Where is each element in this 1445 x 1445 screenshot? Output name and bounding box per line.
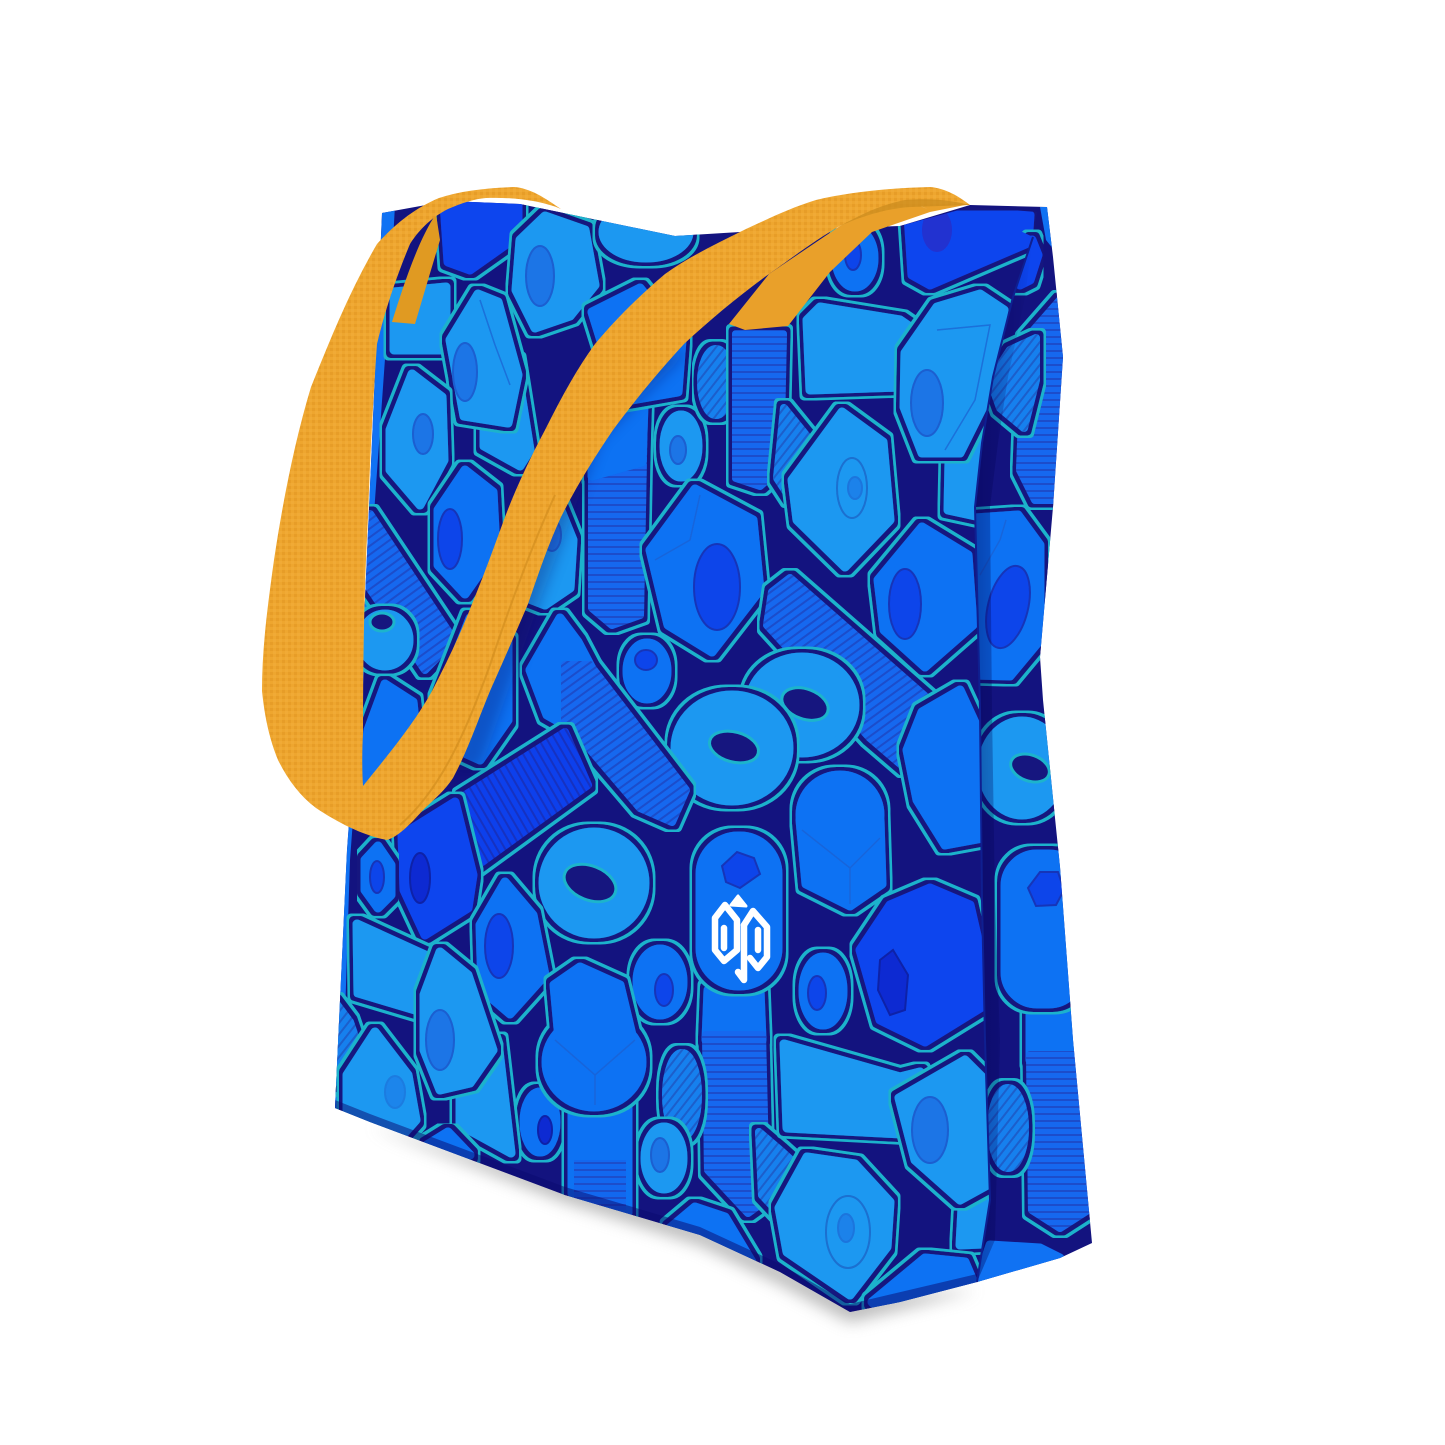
bottom left bar xyxy=(357,924,425,1013)
bolt shaft with logo xyxy=(706,990,766,1213)
gusset top light edge xyxy=(1040,207,1054,250)
vertical threaded bolt xyxy=(736,334,783,486)
threads under cap nut xyxy=(574,1160,626,1210)
fold shadow along gusset xyxy=(975,237,1033,1282)
nut right center xyxy=(878,527,973,667)
cap nut xyxy=(800,775,882,906)
bottom small head xyxy=(427,1132,470,1160)
bolt head diagonal lower right xyxy=(907,690,983,845)
bottom nut right xyxy=(872,1258,977,1320)
ground shadow xyxy=(370,1126,977,1322)
gusset threaded stub xyxy=(990,338,1036,428)
small nut lower center xyxy=(627,643,667,699)
bar right xyxy=(807,307,932,390)
small nut right of bolt xyxy=(803,957,843,1025)
gusset bolt shaft xyxy=(1030,1012,1088,1228)
gusset bolt head xyxy=(1005,854,1081,1004)
lower bar right bottom xyxy=(960,1165,1004,1245)
nut upper right xyxy=(904,294,1004,453)
washer lower xyxy=(675,695,789,801)
nut upper left xyxy=(450,294,518,423)
light nut bottom xyxy=(779,1157,890,1295)
bolt head with logo xyxy=(700,836,778,986)
tote bag body xyxy=(330,201,1092,1320)
nut center left xyxy=(480,882,545,1014)
head behind strap xyxy=(438,618,508,760)
bag fabric base xyxy=(335,201,1092,1312)
bottom nut middle xyxy=(670,1207,752,1262)
bolt head top center xyxy=(592,288,682,402)
short threaded stub xyxy=(701,349,731,415)
bolt long diagonal xyxy=(767,578,935,768)
lower bar right xyxy=(948,405,985,518)
gusset fold line xyxy=(975,237,1033,1282)
bolt top center shaft xyxy=(592,404,644,625)
nut behind strap middle xyxy=(527,508,573,605)
threaded stub lower xyxy=(759,1132,802,1212)
gusset threaded shaft xyxy=(1020,300,1070,500)
gusset nut xyxy=(975,515,1040,676)
nut medium left xyxy=(438,470,496,594)
small nut lower centre xyxy=(645,1127,683,1189)
dark bolt head xyxy=(402,802,473,935)
dark threaded bolt xyxy=(462,732,588,873)
bolt bar upper left xyxy=(394,287,446,350)
washer upper xyxy=(749,657,855,753)
small nut top xyxy=(836,229,874,287)
top light nut xyxy=(603,206,689,258)
dark big nut xyxy=(860,888,985,1042)
nut right bottom xyxy=(899,1060,1000,1200)
bottom left nut xyxy=(424,952,493,1090)
gold strap xyxy=(262,187,970,840)
gusset washer xyxy=(982,721,1062,815)
strap fold edge xyxy=(400,495,555,825)
dark nut top right xyxy=(908,208,1030,285)
gusset threaded stub lower xyxy=(991,1088,1025,1168)
shaft below cap nut xyxy=(572,1100,628,1213)
strap underside shade xyxy=(840,199,970,226)
small nut center xyxy=(664,415,698,477)
diagonal bolt center left xyxy=(530,618,686,822)
bottom hem shading xyxy=(330,1100,977,1314)
strap shadow on bag xyxy=(450,350,690,770)
washer center xyxy=(543,832,645,934)
strap tab right xyxy=(729,198,965,330)
dark nut top left xyxy=(444,203,518,270)
white gap sliver under strap xyxy=(900,198,928,209)
bar right bottom xyxy=(784,1044,920,1135)
gusset print xyxy=(975,207,1088,1284)
small nut bottom left xyxy=(365,846,391,908)
front panel print xyxy=(330,203,1030,1320)
threaded bolt left xyxy=(364,514,454,670)
threaded stub behind nut xyxy=(777,408,810,498)
left edge strip xyxy=(330,205,395,1110)
bottom left light nut xyxy=(347,1032,416,1138)
bottom left threaded xyxy=(334,1002,363,1088)
light nut large xyxy=(792,412,890,567)
nut lower left xyxy=(362,684,418,784)
logo xyxy=(715,896,767,980)
bottom gusset piece xyxy=(977,1245,1060,1284)
nut stack upper left back xyxy=(484,362,530,466)
nut light left xyxy=(390,374,444,505)
bottom left lower bar xyxy=(460,1042,511,1153)
flanged cap nut xyxy=(546,967,642,1107)
small nut lower xyxy=(524,1092,556,1152)
small nut center xyxy=(637,949,683,1015)
nut top xyxy=(516,216,595,328)
gusset top sliver xyxy=(1020,240,1038,285)
short threaded piece xyxy=(666,1053,698,1137)
washer left xyxy=(361,613,409,666)
rear strap tab left xyxy=(392,214,440,324)
big nut center xyxy=(650,489,760,652)
